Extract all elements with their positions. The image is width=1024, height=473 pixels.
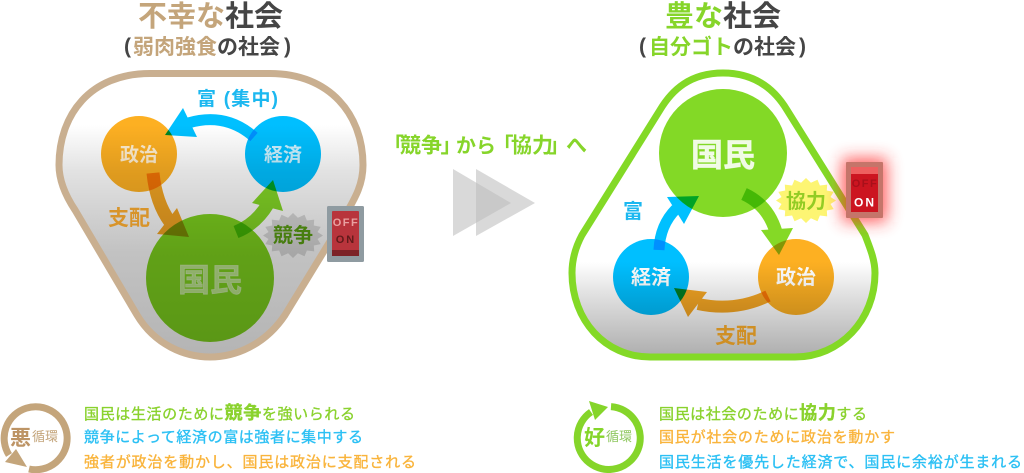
circle: citizens right [659,89,787,217]
arrow: citizens to politics [744,194,793,255]
heading: from competition to cooperation: から [456,136,496,158]
heading: from competition to cooperation: 」 [440,134,462,158]
arrow: citizens to economy [236,180,283,232]
panel: virtuous cycle diagram [572,73,887,357]
circle: politics left [101,116,177,192]
label: economy right: 経済 [631,266,671,289]
label: economy left: 経済 [264,144,302,166]
title: prosperous society: ( [639,35,646,58]
outline left [59,74,363,357]
switch: on with glow: OFF [852,178,878,190]
heading: from competition to cooperation: 」 [548,134,570,158]
circle: citizens left [146,214,274,342]
title: unhappy society: ) [284,35,291,58]
arrow: politics to economy [674,288,768,317]
text block: virtuous cycle explanation [659,403,1022,471]
switch: off: OFF [333,217,359,229]
title: unhappy society: 弱肉強食の社会 [133,36,280,59]
gradient shade overlay right [572,73,875,357]
heading: from competition to cooperation: へ [566,134,587,158]
icon: vicious cycle [4,407,67,470]
text block: vicious cycle explanation: 強者が政治を動かし、国民は政治に支配される [84,454,416,471]
switch: on with glow [842,158,887,222]
burst: competition [263,213,323,258]
icon: virtuous cycle: 循環 [606,429,632,444]
label: domination left: 支配 [108,207,150,230]
gradient shade overlay left [59,74,363,357]
text block: virtuous cycle explanation: 国民生活を優先した経済で、国民に余裕が生まれる [659,454,1022,471]
label: citizens left: 国民 [178,262,242,298]
text block: vicious cycle explanation: 国民は生活のために競争を強いられる [84,403,355,423]
title: unhappy society: 不幸な社会 [138,0,283,33]
arrow: wealth concentration [165,108,254,137]
title: prosperous society: 豊な社会 [665,0,781,33]
heading: from competition to cooperation: 「 [492,134,514,158]
circle: politics right [758,239,834,315]
title: unhappy society: ( [124,35,131,58]
title: prosperous society: ) [799,35,806,58]
label: wealth concentrated: 富 (集中) [197,88,278,110]
switch: off: ON [336,234,356,246]
text block: virtuous cycle explanation: 国民が社会のために政治を動かす [659,429,895,446]
label: competition: 競争 [273,224,313,247]
label: politics left: 政治 [120,144,158,166]
arrow: domination left [153,173,189,237]
title: prosperous society: 自分ゴトの社会 [649,35,796,59]
outline right [572,73,875,357]
label: politics right: 政治 [776,266,816,289]
panel: vicious cycle diagram [59,74,364,357]
circle: economy right [613,239,689,315]
text block: virtuous cycle explanation: 国民は社会のために協力する [659,403,867,423]
icon: virtuous cycle: 好 [584,427,605,450]
label: wealth: 富 [623,200,643,223]
circle: economy left [245,116,321,192]
switch: on with glow: ON [854,196,876,210]
title: prosperous society [639,0,806,59]
icon: virtuous cycle [577,401,640,470]
label: citizens right: 国民 [691,137,755,173]
arrow: economy to citizens [659,196,699,250]
icon: vicious cycle: 循環 [32,429,58,444]
label: cooperation: 協力 [786,190,826,213]
heading: from competition to cooperation: 「 [383,134,404,158]
text block: vicious cycle explanation [84,403,416,471]
text block: vicious cycle explanation: 競争によって経済の富は強者に集中する [84,428,363,446]
heading: from competition to cooperation: 協力 [511,134,553,158]
icon: vicious cycle: 悪 [10,427,31,450]
heading: from competition to cooperation: 競争 [400,134,442,158]
title: unhappy society [124,0,291,59]
switch: off [327,206,364,262]
arrows: center double triangle [453,169,535,236]
label: domination right: 支配 [715,325,757,348]
burst: cooperation [776,178,836,223]
